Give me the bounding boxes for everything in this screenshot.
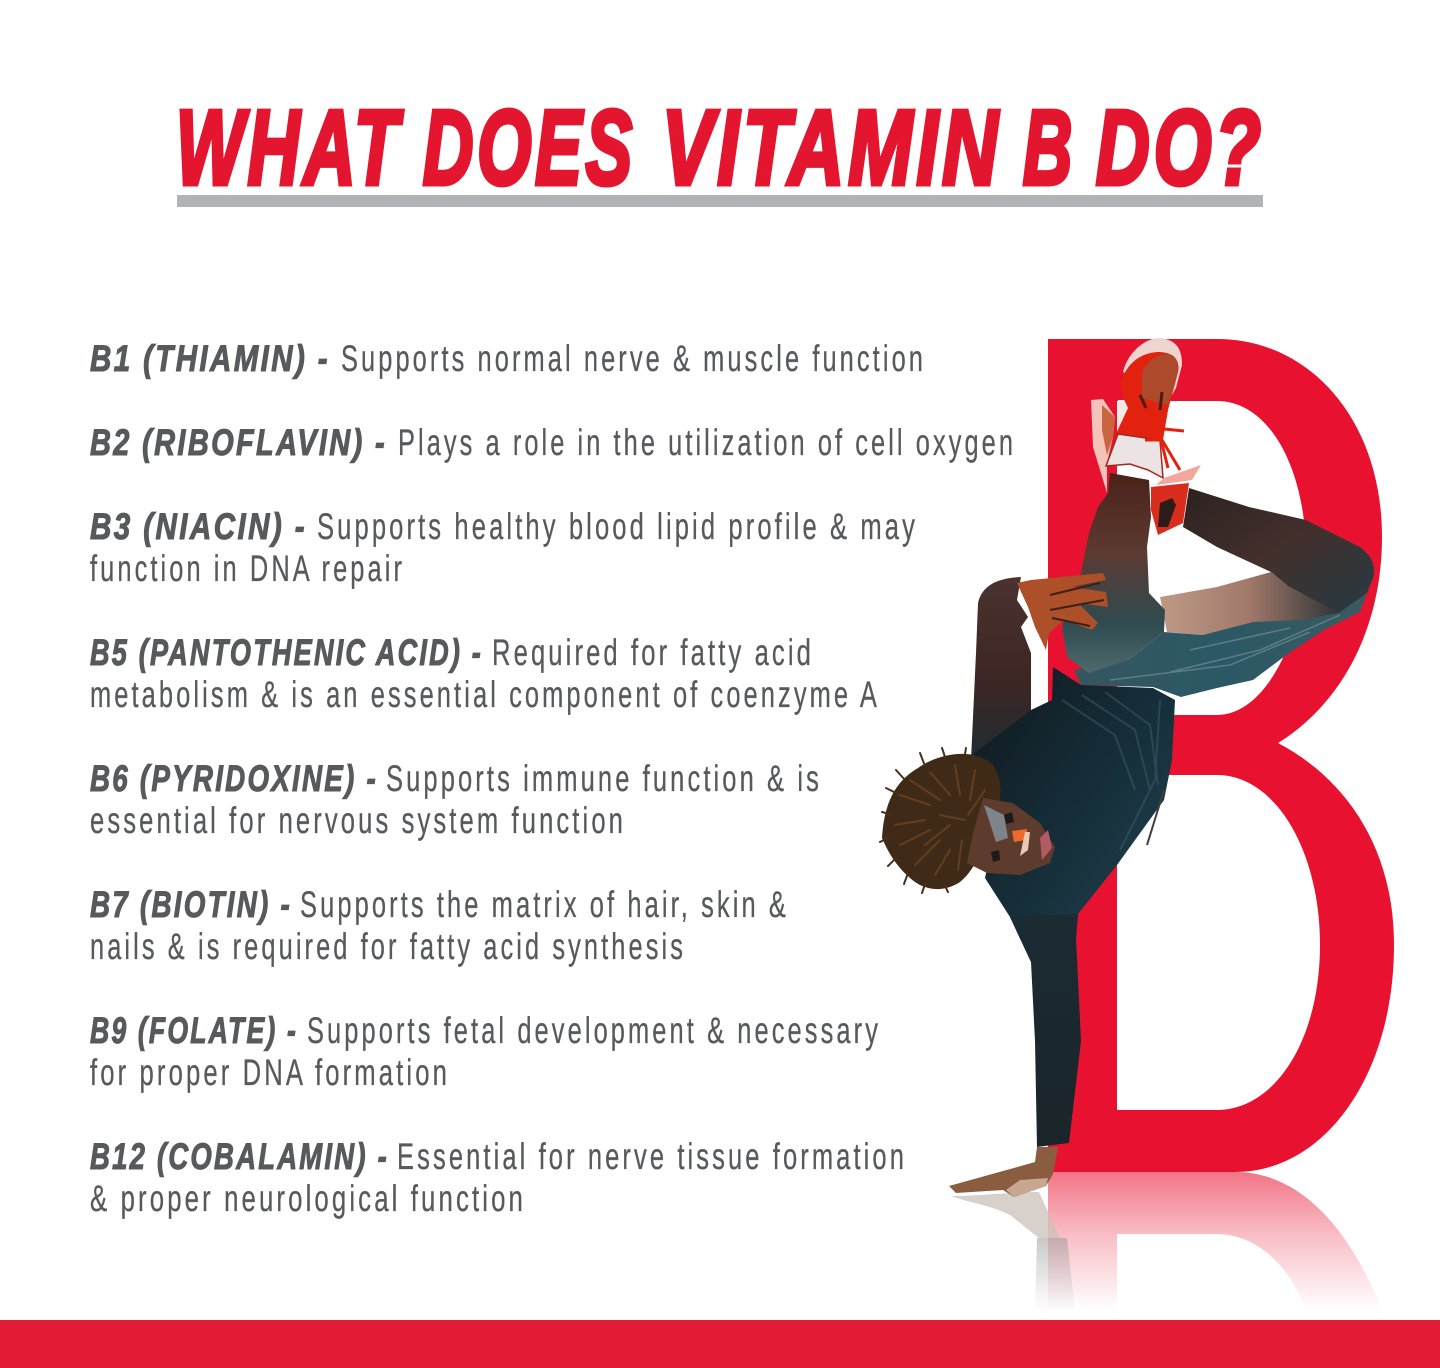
B5 entry: metabolism & is an essential component of coenzyme A bbox=[90, 674, 880, 715]
B12 entry bbox=[90, 1136, 907, 1219]
B9 entry: B9 (FOLATE) - bbox=[90, 1010, 298, 1051]
B6 entry: essential for nervous system function bbox=[90, 800, 626, 841]
hand and arm reflection bbox=[951, 1192, 1075, 1312]
upper leg bbox=[1183, 488, 1374, 613]
hair mass bbox=[882, 754, 1000, 889]
thigh bbox=[1160, 572, 1339, 635]
large letter B bbox=[1048, 339, 1394, 1172]
forehead highlight bbox=[984, 805, 1008, 842]
B1 entry bbox=[90, 338, 926, 379]
B6 entry bbox=[90, 758, 822, 841]
bottom band bbox=[0, 1320, 1440, 1368]
B3 entry: function in DNA repair bbox=[90, 548, 405, 589]
B9 entry: Supports fetal development & necessary bbox=[307, 1010, 881, 1051]
hair lighter locks bbox=[895, 765, 985, 875]
nose highlight bbox=[1012, 829, 1027, 842]
shoe laces bbox=[1125, 425, 1184, 470]
shoe: second heel collar bbox=[1156, 465, 1201, 485]
shoe: red upper bbox=[1115, 352, 1178, 440]
title: B bbox=[1023, 89, 1076, 207]
hair bbox=[880, 748, 1000, 893]
shin bbox=[1062, 473, 1165, 673]
title: WHAT bbox=[176, 89, 404, 207]
B7 entry: B7 (BIOTIN) - bbox=[90, 884, 292, 925]
shoe: heel dark patch bbox=[1158, 498, 1176, 527]
shirt folds bbox=[1062, 692, 1160, 850]
B9 entry bbox=[90, 1010, 881, 1093]
lower arm bbox=[1010, 914, 1081, 1147]
shoe: tread bbox=[1142, 354, 1178, 405]
title bbox=[176, 89, 1265, 207]
B2 entry bbox=[90, 422, 1016, 463]
B3 entry: B3 (NIACIN) - bbox=[90, 506, 307, 547]
B12 entry: & proper neurological function bbox=[90, 1178, 526, 1219]
title: DO? bbox=[1096, 89, 1265, 207]
B2 entry: B2 (RIBOFLAVIN) - bbox=[90, 422, 387, 463]
title underline bbox=[177, 195, 1263, 207]
shoe: sole cap bbox=[1123, 338, 1182, 402]
shoe: white strip bbox=[1117, 400, 1130, 432]
B3 entry: Supports healthy blood lipid profile & may bbox=[317, 506, 918, 547]
B5 entry: B5 (PANTOTHENIC ACID) - bbox=[90, 632, 483, 673]
face bbox=[967, 798, 1055, 875]
drawstring bbox=[1147, 790, 1164, 845]
B6 entry: Supports immune function & is bbox=[386, 758, 822, 799]
B1 entry: Supports normal nerve & muscle function bbox=[341, 338, 926, 379]
nose ridge bbox=[1020, 832, 1030, 856]
title: VITAMIN bbox=[662, 89, 1002, 207]
mouth bbox=[1040, 830, 1052, 860]
finger shadows bbox=[1050, 583, 1104, 626]
eyes bbox=[991, 812, 1014, 862]
shoe: dark eyelets bbox=[1140, 392, 1162, 410]
B12 entry: B12 (COBALAMIN) - bbox=[90, 1136, 389, 1177]
letter B reflection bbox=[1048, 1172, 1378, 1300]
shoe: far sole bbox=[1091, 399, 1115, 493]
B12 entry: Essential for nerve tissue formation bbox=[397, 1136, 907, 1177]
shoe: white toe bbox=[1106, 434, 1163, 478]
B7 entry: Supports the matrix of hair, skin & bbox=[300, 884, 789, 925]
trouser fold highlights bbox=[1110, 615, 1340, 680]
B2 entry: Plays a role in the utilization of cell oxygen bbox=[398, 422, 1016, 463]
hand on leg bbox=[1017, 573, 1108, 650]
title: DOES bbox=[423, 89, 636, 207]
raised arm bbox=[971, 577, 1031, 760]
B1 entry: B1 (THIAMIN) - bbox=[90, 338, 330, 379]
B3 entry bbox=[90, 506, 918, 589]
B9 entry: for proper DNA formation bbox=[90, 1052, 450, 1093]
hand highlight bbox=[1006, 1178, 1048, 1197]
B7 entry: nails & is required for fatty acid synthesis bbox=[90, 926, 686, 967]
torso bbox=[971, 667, 1175, 962]
B6 entry: B6 (PYRIDOXINE) - bbox=[90, 758, 378, 799]
dancer figure bbox=[880, 338, 1374, 1197]
trouser folds bbox=[1074, 593, 1367, 697]
vitamin list bbox=[90, 338, 1016, 1219]
supporting hand bbox=[949, 1147, 1058, 1197]
shoe: second red heel bbox=[1151, 483, 1189, 535]
hair strands bbox=[880, 748, 966, 893]
B7 entry bbox=[90, 884, 789, 967]
B5 entry: Required for fatty acid bbox=[492, 632, 814, 673]
shoe: far sole inner bbox=[1102, 405, 1115, 455]
B5 entry bbox=[90, 632, 880, 715]
